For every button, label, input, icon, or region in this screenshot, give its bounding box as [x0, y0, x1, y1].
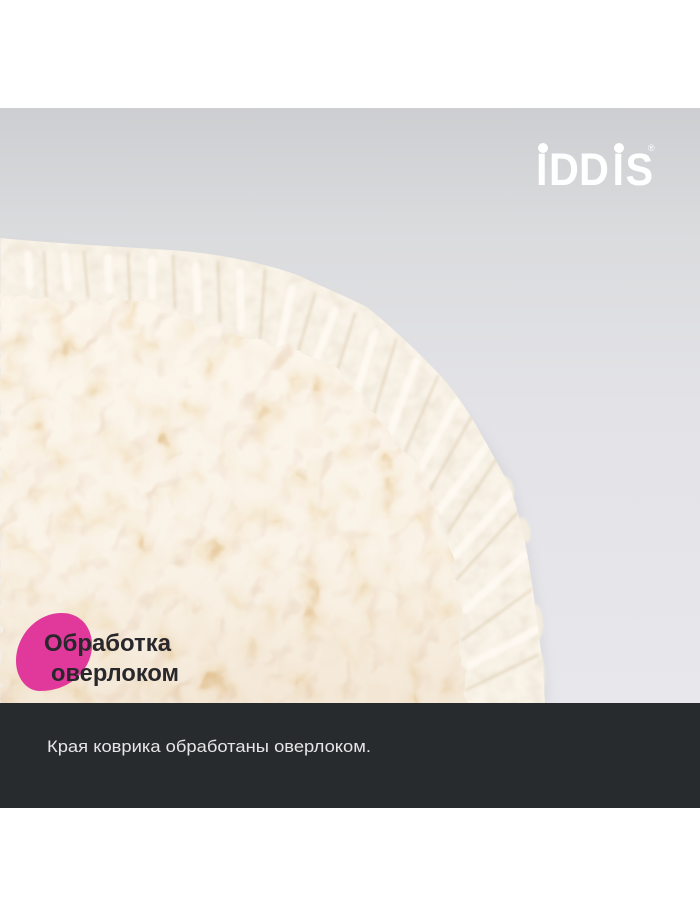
logo: IDDIS: IDDIS — [536, 145, 653, 195]
strand highlights — [28, 255, 536, 665]
registered mark: ® — [648, 143, 655, 153]
logo dots — [538, 143, 624, 153]
caption bar — [0, 703, 700, 808]
caption text: Края коврика обработаны оверлоком. — [47, 737, 371, 756]
stitch strands — [44, 252, 538, 690]
overlock edge band — [0, 230, 560, 710]
pink blob — [16, 613, 92, 691]
label: pink blob with heading — [16, 613, 179, 691]
heading: Обработка — [44, 630, 172, 657]
rug: overlocked bath mat — [0, 230, 560, 720]
shaggy pile surface — [0, 293, 468, 703]
scallop bumps outside edge — [504, 476, 546, 688]
photo panel: grey background — [0, 108, 700, 720]
heading: оверлоком — [51, 660, 179, 687]
